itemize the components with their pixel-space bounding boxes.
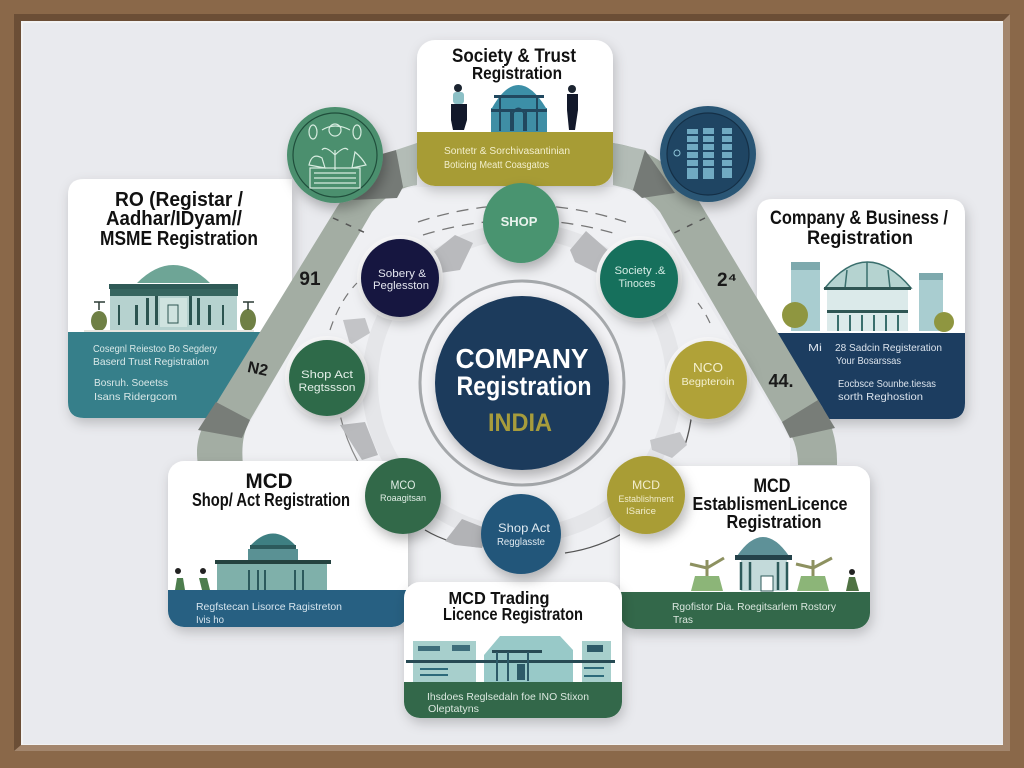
right panel body text: Your Bosarssas: [836, 355, 901, 367]
icon: pavilion and plants: [690, 537, 859, 591]
node: society and licences: Tinoces: [618, 278, 656, 290]
node: NCO registration: NCO: [693, 360, 723, 375]
central hub: [420, 281, 624, 485]
MCD establishment body text: Rgofistor Dia. Roegitsarlem Rostory: [672, 601, 837, 613]
node: MCD establishment: Establishment: [618, 494, 674, 505]
society panel heading: Registration: [472, 63, 562, 83]
panel: company and business registration: [757, 199, 965, 419]
inner hub background: [243, 187, 790, 585]
panel: MCD establishment licence registration: [620, 466, 870, 629]
left panel body text: [93, 343, 218, 403]
node: shop act blue: Shop Act: [498, 521, 551, 535]
node: NCO registration: Begpteroin: [682, 377, 734, 388]
node: MCD establishment: [607, 456, 685, 534]
MCD shop act body text: [196, 601, 342, 626]
central hub: INDIA: [488, 409, 552, 437]
MCD shop act body text: Ivis ho: [196, 614, 224, 626]
band number: 91: 91: [299, 269, 321, 290]
node: MCD establishment: MCD: [632, 478, 660, 492]
band number: 44: 44.: [768, 371, 794, 391]
node: shop act registration: Regtssson: [298, 382, 356, 394]
node: MCO registration: MCO: [390, 478, 416, 492]
icon: domed hall and figures: [175, 534, 331, 590]
node: society and registration: Sobery &: [378, 268, 427, 280]
MCD establishment heading: Registration: [726, 512, 822, 532]
node: NCO registration: [665, 337, 751, 423]
society panel body text: Boticing Meatt Coasgatos: [444, 160, 549, 171]
node: shop act blue: [481, 494, 561, 574]
MCD shop act heading: Shop/ Act Registration: [192, 490, 350, 510]
node: society and licences: [596, 236, 682, 322]
right panel heading: Company & Business /: [770, 207, 948, 229]
MCD establishment body text: Tras: [673, 614, 693, 626]
left panel heading: [100, 189, 258, 250]
left panel heading: RO (Registar /: [115, 189, 243, 211]
icon: civic building and two people: [451, 84, 578, 132]
MCD shop act heading: [192, 470, 350, 510]
MCD establishment heading: EstablismenLicence: [692, 494, 848, 514]
MCD trading body text: Oleptatyns: [428, 703, 479, 715]
society panel body text: [444, 146, 570, 171]
left panel heading: Aadhar/IDyam//: [106, 208, 242, 230]
MCD establishment heading: MCD: [754, 476, 790, 497]
left panel body text: Bosruh. Soeetss: [94, 377, 168, 389]
society panel heading: Society & Trust: [452, 46, 577, 67]
left panel body text: Isans Ridergcom: [94, 391, 177, 403]
panel: MCD shop act registration: [168, 461, 408, 627]
ring track with dashed arcs: [330, 205, 710, 553]
MCD shop act body text: Regfstecan Lisorce Ragistreton: [196, 601, 342, 613]
node: society and registration: Peglesston: [373, 280, 429, 292]
MCD shop act heading: MCD: [246, 470, 292, 493]
right panel body text: 28 Sadcin Registeration: [835, 342, 942, 354]
MCD trading heading: MCD Trading: [448, 588, 550, 608]
left panel body text: Cosegnl Reiestoo Bo Segdery: [93, 343, 218, 355]
node: shop: [483, 183, 559, 263]
right panel heading: Registration: [807, 227, 913, 249]
node: shop act registration: [285, 336, 369, 420]
node: MCD establishment: ISarice: [626, 506, 656, 517]
MCD trading body text: Ihsdoes Reglsedaln foe INO Stixon: [427, 691, 589, 703]
panel: society and trust registration: [417, 40, 613, 186]
panel: RO Aadhar Udyam MSME registration: [68, 179, 292, 418]
node: shop: SHOP: [501, 214, 538, 229]
left panel body text: Baserd Trust Registration: [93, 356, 209, 368]
icon: government building: [84, 265, 256, 332]
band number: N2: N2: [246, 359, 270, 380]
central hub: Registration: [456, 371, 592, 401]
right panel body text: Eocbsce Sounbe.tiesas: [838, 378, 936, 390]
band number: 24: 2⁴: [717, 270, 737, 291]
icon: trading buildings and machines: [406, 636, 615, 682]
icon badge: blue towers: [660, 106, 756, 202]
right panel body text: Mi: [808, 342, 822, 354]
MCD establishment body text: [672, 601, 837, 626]
MCD establishment heading: [692, 476, 848, 532]
icon: domed office and towers: [782, 262, 954, 332]
node: society and registration: [357, 235, 443, 321]
MCD trading body text: [427, 691, 589, 715]
node: society and licences: Society .&: [614, 265, 666, 277]
icon badge: green scales and books: [287, 107, 383, 203]
central hub: COMPANY: [456, 343, 589, 374]
node: MCO registration: Roaagitsan: [380, 493, 426, 504]
right panel body text: sorth Reghostion: [838, 391, 923, 403]
MCD trading heading: Licence Registraton: [443, 604, 583, 624]
society panel heading: [452, 46, 577, 83]
node: MCO registration: [365, 458, 441, 534]
panel: MCD trading licence registration: [404, 582, 622, 718]
society panel body text: Sontetr & Sorchivasantinian: [444, 146, 570, 157]
right panel heading: [770, 207, 948, 249]
node: shop act blue: Regglasste: [497, 537, 545, 548]
right panel body text: [808, 342, 942, 403]
left panel heading: MSME Registration: [100, 228, 258, 250]
MCD trading heading: [443, 588, 583, 624]
connecting bands: [197, 143, 837, 465]
node: shop act registration: Shop Act: [301, 369, 353, 381]
